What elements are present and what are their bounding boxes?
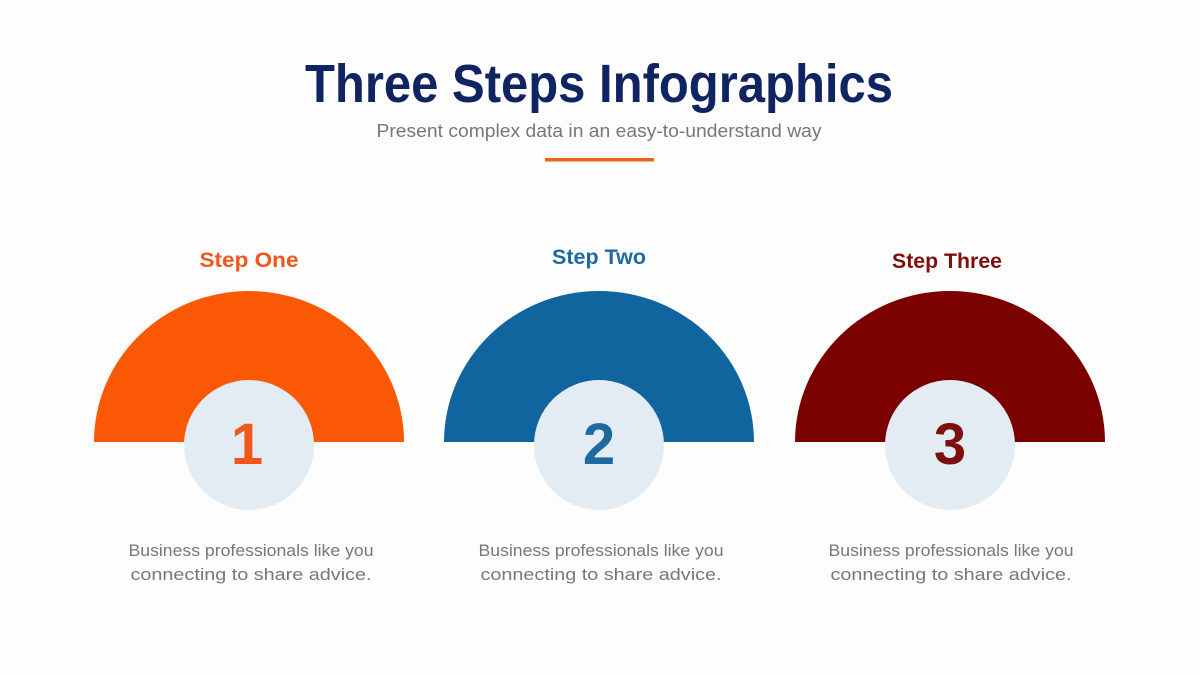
heading: step one: Step One: [200, 249, 298, 272]
description one: connecting to share advice.: [130, 565, 372, 584]
number circle 1: 1: [231, 412, 263, 477]
description three: connecting to share advice.: [830, 565, 1072, 584]
half disc: orange: [94, 291, 404, 442]
step one: [94, 249, 404, 584]
description three: Business professionals like you: [828, 541, 1074, 560]
title: Three Steps Infographics: [305, 54, 893, 114]
half disc: dark red: [795, 291, 1105, 442]
description two: connecting to share advice.: [480, 565, 722, 584]
number circle 1: [184, 380, 314, 510]
number circle 3: 3: [934, 412, 966, 477]
description one: Business professionals like you: [128, 541, 374, 560]
step two: [444, 246, 754, 584]
accent line: [545, 158, 654, 162]
step three: [795, 250, 1105, 584]
description two: [478, 541, 724, 584]
description three: [828, 541, 1074, 584]
description two: Business professionals like you: [478, 541, 724, 560]
number circle 3: [885, 380, 1015, 510]
heading: step three: Step Three: [892, 250, 1002, 273]
subtitle: Present complex data in an easy-to-understand way: [376, 121, 822, 141]
description one: [128, 541, 374, 584]
heading: step two: Step Two: [552, 246, 646, 269]
number circle 2: 2: [583, 412, 615, 477]
half disc: blue: [444, 291, 754, 442]
number circle 2: [534, 380, 664, 510]
